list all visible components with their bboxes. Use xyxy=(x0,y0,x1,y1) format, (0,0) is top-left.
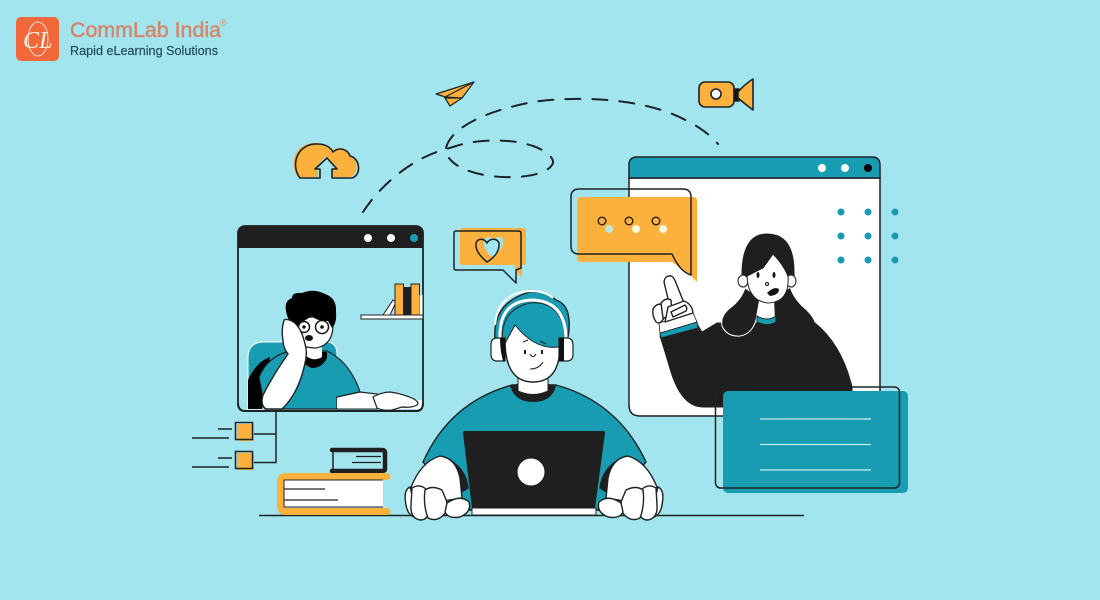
icon: cloud upload xyxy=(294,143,359,178)
main person with laptop xyxy=(405,291,663,520)
man raised arm and hand xyxy=(262,319,306,409)
man face xyxy=(293,317,333,348)
teal text card xyxy=(716,387,908,493)
facial features xyxy=(523,340,546,369)
cuff xyxy=(660,322,698,338)
eyes and mouth xyxy=(756,272,779,296)
back hair xyxy=(741,233,795,285)
large orange book xyxy=(280,476,387,512)
ears xyxy=(738,275,748,287)
window frame outline bottom xyxy=(238,403,423,411)
neck and collar xyxy=(760,300,774,317)
headband outer rim xyxy=(495,291,553,325)
shelf with books xyxy=(361,284,423,319)
shirt xyxy=(423,385,646,510)
laptop xyxy=(463,431,605,515)
window dots xyxy=(364,234,418,242)
right arm and hand xyxy=(598,456,663,520)
headphones xyxy=(491,338,573,361)
neck xyxy=(518,376,548,394)
chat speech bubble xyxy=(571,189,697,282)
brand name: CommLab India xyxy=(70,19,221,42)
title bar xyxy=(238,226,423,248)
node 1 xyxy=(236,422,254,441)
window dots xyxy=(818,164,872,172)
books stack xyxy=(280,450,387,512)
man hand on keyboard xyxy=(373,392,418,410)
dashed flight path xyxy=(363,99,718,212)
icon: heart speech bubble xyxy=(454,228,526,283)
headband xyxy=(500,300,566,340)
face xyxy=(505,325,560,382)
glasses and mouth xyxy=(298,320,328,341)
registered mark: ® xyxy=(220,18,227,28)
ground line xyxy=(259,514,804,516)
left arm and hand xyxy=(405,456,470,520)
logo mark xyxy=(16,17,59,61)
chair xyxy=(248,342,337,409)
man right arm xyxy=(337,392,377,409)
dot grid xyxy=(838,208,898,264)
tagline: Rapid eLearning Solutions xyxy=(70,43,218,58)
collar xyxy=(510,383,556,402)
sweater and raised arm xyxy=(660,323,852,407)
man torso in teal shirt xyxy=(259,351,360,409)
title bar xyxy=(629,157,880,178)
man hair xyxy=(286,291,336,328)
window body xyxy=(629,178,880,416)
logo mark: CL xyxy=(23,28,52,54)
small dark book xyxy=(332,450,385,471)
icon: video camera xyxy=(699,79,753,110)
hair lobes xyxy=(722,288,760,336)
pointing hand xyxy=(653,276,693,323)
window frame xyxy=(238,226,423,411)
panel: right video window xyxy=(629,157,898,416)
desk edge xyxy=(393,400,422,409)
chair shadow xyxy=(248,357,270,409)
face xyxy=(747,254,788,303)
node 2 xyxy=(236,452,254,470)
icon: paper plane xyxy=(436,82,474,106)
logo xyxy=(16,17,227,61)
shirt collar and neck xyxy=(303,352,327,368)
fringe xyxy=(502,303,566,347)
woman xyxy=(653,233,852,407)
typing dots xyxy=(598,217,667,233)
panel: left video window xyxy=(238,226,423,411)
connector nodes xyxy=(192,411,276,470)
hair back xyxy=(495,292,569,350)
